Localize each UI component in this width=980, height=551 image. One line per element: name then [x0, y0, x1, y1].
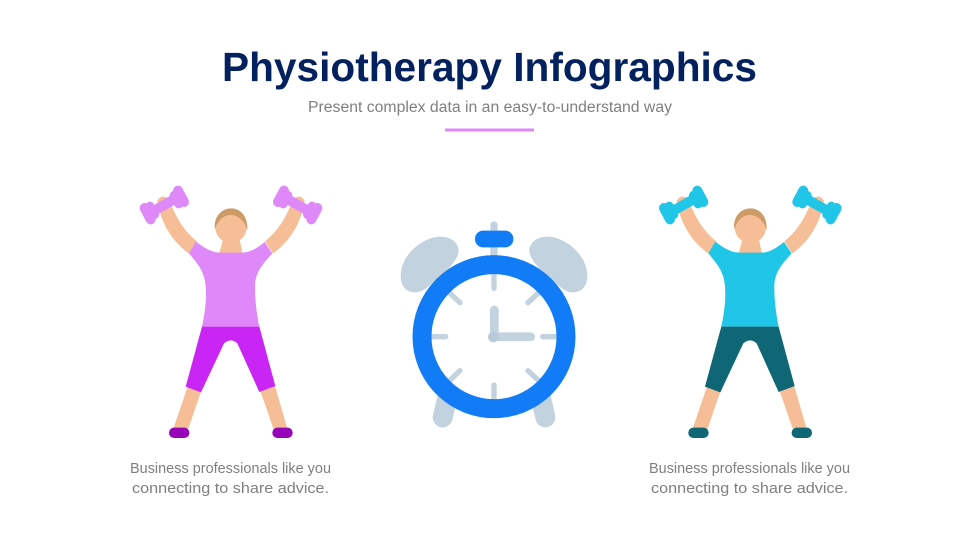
left arm	[677, 196, 716, 254]
shorts	[186, 327, 275, 392]
left caption	[130, 461, 331, 497]
face	[735, 212, 766, 243]
left bell	[401, 237, 459, 292]
left caption: Business professionals like you	[130, 461, 331, 477]
right bell	[529, 237, 587, 292]
left dumbbell	[145, 191, 184, 219]
title: Physiotherapy Infographics	[222, 44, 757, 90]
right caption: connecting to share advice.	[651, 481, 848, 497]
neck	[219, 238, 243, 253]
shirt	[189, 242, 272, 327]
figure: purple exerciser with dumbbells	[145, 191, 317, 438]
centre pin	[488, 332, 499, 342]
right foot	[540, 393, 545, 417]
clock face	[422, 265, 566, 409]
right leg	[260, 386, 287, 429]
left arm	[157, 196, 197, 254]
right shoe	[272, 428, 293, 438]
neck	[739, 238, 762, 253]
hair	[215, 208, 247, 231]
hour ticks	[432, 273, 557, 400]
top stem	[483, 225, 505, 258]
left caption: connecting to share advice.	[132, 481, 329, 497]
hair	[734, 208, 767, 231]
left foot	[443, 393, 448, 417]
right dumbbell	[278, 191, 317, 219]
right caption: Business professionals like you	[649, 461, 850, 477]
shirt	[708, 242, 792, 327]
clock ring	[422, 265, 566, 409]
left leg	[693, 387, 720, 429]
subtitle: Present complex data in an easy-to-understand way	[308, 99, 672, 116]
title underline	[445, 128, 534, 132]
left dumbbell	[664, 191, 703, 219]
left shoe	[169, 428, 189, 438]
right arm	[784, 196, 824, 254]
face	[215, 212, 247, 243]
right caption	[649, 461, 850, 497]
right dumbbell	[797, 191, 837, 219]
right leg	[779, 386, 807, 429]
alarm clock	[401, 225, 587, 417]
right shoe	[792, 428, 812, 438]
figure: blue exerciser with dumbbells	[664, 191, 837, 438]
top button	[475, 231, 513, 247]
shorts	[705, 327, 795, 392]
right arm	[265, 196, 305, 254]
left shoe	[688, 428, 709, 438]
left leg	[173, 387, 201, 429]
clock hands	[494, 310, 531, 337]
